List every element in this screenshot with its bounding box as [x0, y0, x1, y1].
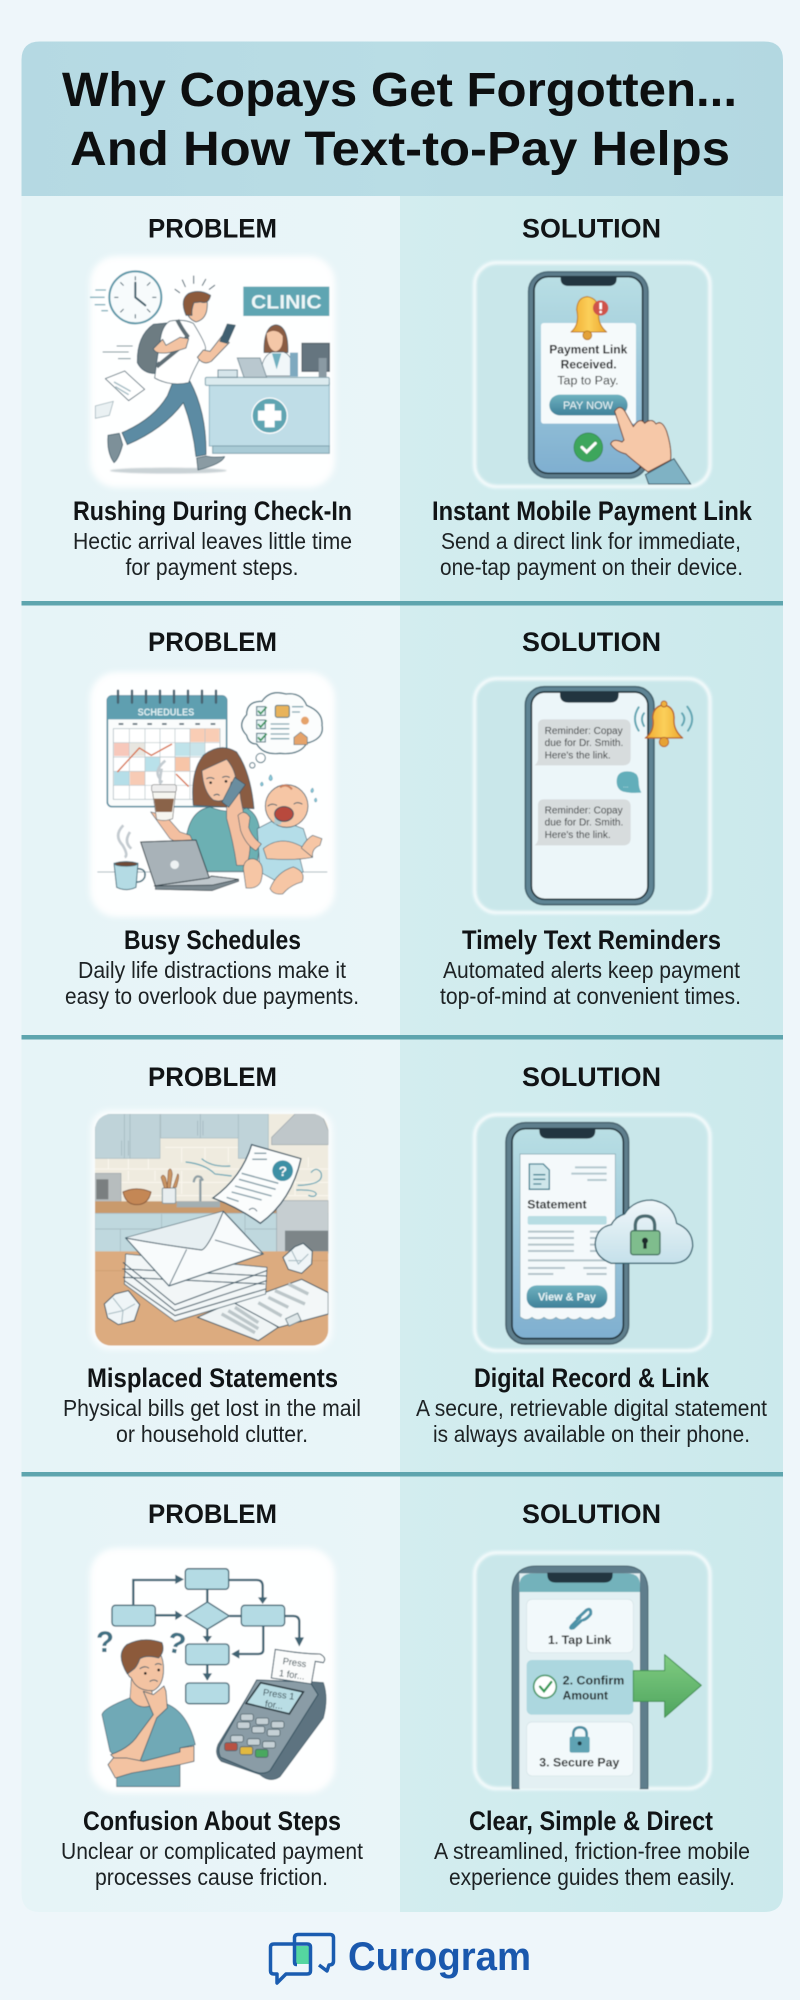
wooden table: [95, 1251, 328, 1346]
step 2 card: [527, 1660, 633, 1715]
phone: [506, 1123, 629, 1344]
body: digital record: is always available on their phone.: [433, 1421, 750, 1447]
man: [108, 291, 235, 470]
illustration: kitchen with lost mail: [91, 1110, 332, 1350]
kitchen wall and cabinets: [94, 1114, 329, 1254]
flowchart: [112, 1569, 304, 1704]
body: confusion: [61, 1838, 363, 1890]
card text: Payment Link: [549, 343, 628, 357]
body: misplaced statements: Physical bills get lost in the mail: [63, 1395, 361, 1421]
row 3: misplaced statements: [63, 1062, 767, 1447]
heading: timely text reminders: Timely Text Reminders: [462, 925, 721, 955]
thought bubble: [242, 693, 322, 768]
body: rushing: [73, 528, 352, 580]
loose papers: [198, 1279, 328, 1341]
desk: [205, 377, 329, 453]
heading: clear simple and direct: Clear, Simple & Direct: [469, 1806, 713, 1836]
body: misplaced statements: or household clutter.: [116, 1421, 308, 1447]
solution heading row 3: SOLUTION: [522, 1062, 661, 1092]
thinking man: [102, 1640, 195, 1787]
green check: [574, 433, 603, 462]
receptionist: [218, 325, 329, 377]
reminder bubble 2: Reminder: Copay: [545, 805, 623, 816]
notification card: [541, 323, 636, 424]
problem heading row 3: PROBLEM: [148, 1062, 277, 1092]
payment terminal: for...: [264, 1699, 284, 1711]
bell with alert: [571, 297, 608, 340]
body: clear simple: A streamlined, friction-free mobile: [434, 1838, 750, 1864]
laptop: [141, 840, 239, 891]
flying statement: [213, 1145, 301, 1223]
step 1 card: 1. Tap Link: [548, 1633, 612, 1647]
digital receipt: Statement: [527, 1198, 587, 1212]
reminder bubble 1: [535, 719, 631, 765]
body: misplaced statements: [63, 1395, 361, 1447]
body: confusion: Unclear or complicated payment: [61, 1838, 363, 1864]
illustration: confused man, flowchart and card terminal: [90, 1548, 335, 1793]
pay now button: PAY NOW: [563, 400, 614, 412]
row 2: busy schedules: [65, 627, 741, 1009]
phone: [529, 272, 648, 478]
body: rushing: Hectic arrival leaves little time: [73, 528, 352, 554]
clock: [90, 271, 161, 323]
illustration: phone payment link: Received.: [561, 358, 617, 372]
payment terminal: [217, 1649, 326, 1780]
cloud lock: [595, 1200, 693, 1263]
heading: busy schedules: Busy Schedules: [124, 925, 301, 955]
illustration: digital statement with cloud lock: [475, 1115, 710, 1351]
body: timely text reminders: Automated alerts keep payment: [443, 957, 740, 983]
typing bubble: ...: [623, 782, 629, 789]
title header: [22, 42, 783, 196]
heading: misplaced statements: Misplaced Statements: [87, 1363, 338, 1393]
body: confusion: processes cause friction.: [95, 1864, 328, 1890]
reminder bubble 1: Here's the link.: [545, 750, 611, 761]
illustration: three step phone flow: [475, 1553, 710, 1789]
title header: And How Text-to-Pay Helps: [70, 123, 730, 176]
illustration: phone payment link: Tap to Pay.: [557, 373, 619, 387]
heading: rushing during check-in: Rushing During Check-In: [73, 496, 352, 526]
title header: Why Copays Get Forgotten...: [62, 64, 737, 117]
payment terminal: Press: [282, 1656, 307, 1669]
question marks: ?: [96, 1626, 114, 1659]
body: clear simple: [434, 1838, 750, 1890]
row dividers: [22, 601, 783, 1476]
baby: [238, 785, 322, 894]
calendar: SCHEDULES: [138, 707, 195, 718]
phone: [525, 687, 654, 905]
body: timely text reminders: [440, 957, 741, 1009]
row 1: rushing during check-in: [73, 214, 752, 580]
hand: [611, 407, 691, 484]
solution heading row 1: SOLUTION: [522, 214, 661, 244]
digital receipt: View & Pay: [538, 1292, 597, 1304]
footer logo: Curogram: [270, 1934, 531, 1983]
clinic sign: [243, 287, 329, 316]
logo icon: chat bubbles: [270, 1934, 334, 1983]
coffee mug: [114, 862, 145, 890]
typing bubble: [617, 771, 641, 793]
body: instant link: one-tap payment on their device.: [440, 554, 743, 580]
step 2 card: 2. Confirm: [563, 1674, 624, 1688]
heading: instant mobile payment link: Instant Mobile Payment Link: [432, 496, 752, 526]
reminder bubble 2: [535, 799, 631, 845]
row 4: confusion about steps: [61, 1499, 750, 1890]
body: rushing: for payment steps.: [126, 554, 298, 580]
flying statement: ?: [279, 1163, 287, 1179]
body: instant link: [440, 528, 743, 580]
table line: [97, 871, 327, 873]
heading: confusion about steps: Confusion About Steps: [83, 1806, 341, 1836]
body: busy schedules: easy to overlook due payments.: [65, 983, 359, 1009]
payment terminal: Press 1: [262, 1687, 295, 1702]
pay now button: [549, 395, 628, 415]
solution heading row 4: SOLUTION: [522, 1499, 661, 1529]
reminder bubble 2: due for Dr. Smith.: [545, 817, 623, 828]
body: digital record: A secure, retrievable digital statement: [416, 1395, 767, 1421]
body: digital record: [416, 1395, 767, 1447]
ringing bell: [635, 701, 692, 747]
body: busy schedules: [65, 957, 359, 1009]
illustration: phone payment link: [475, 263, 710, 487]
shadow: [110, 468, 227, 474]
wind lines: [186, 1159, 321, 1196]
calendar: [107, 691, 227, 807]
step 1 card: [527, 1599, 633, 1653]
envelope stack: [122, 1211, 267, 1321]
logo wordmark: Curogram: [348, 1935, 531, 1979]
reminder bubble 1: due for Dr. Smith.: [545, 738, 623, 749]
body: clear simple: experience guides them easily.: [449, 1864, 735, 1890]
digital receipt: [520, 1154, 615, 1320]
reminder bubble 2: Here's the link.: [545, 830, 611, 841]
phone: [512, 1566, 648, 1789]
problem heading row 1: PROBLEM: [148, 214, 277, 244]
clinic sign: CLINIC: [251, 293, 322, 314]
problem heading row 4: PROBLEM: [148, 1499, 277, 1529]
illustration: man rushing past clinic desk: [90, 256, 335, 488]
solution heading row 2: SOLUTION: [522, 627, 661, 657]
step 3 card: 3. Secure Pay: [539, 1756, 620, 1770]
question marks: [96, 1626, 189, 1662]
heading: digital record and link: Digital Record & Link: [474, 1363, 709, 1393]
problem heading row 2: PROBLEM: [148, 627, 277, 657]
step 3 card: [527, 1722, 633, 1776]
green arrow: [633, 1655, 701, 1717]
body: timely text reminders: top-of-mind at convenient times.: [440, 983, 741, 1009]
woman: [151, 748, 260, 871]
steam: [118, 761, 165, 857]
body: busy schedules: Daily life distractions make it: [78, 957, 346, 983]
question marks: ?: [164, 1626, 189, 1662]
illustration: busy parent with calendar: [90, 672, 335, 917]
step 2 card: Amount: [563, 1688, 608, 1702]
body: instant link: Send a direct link for immediate,: [441, 528, 741, 554]
illustration: phone text reminders: [475, 679, 710, 913]
flying papers: [105, 371, 145, 401]
sweat drops: [260, 775, 317, 802]
crumpled paper balls: [104, 1243, 312, 1325]
payment terminal: 1 for...: [278, 1668, 305, 1682]
reminder bubble 1: Reminder: Copay: [545, 726, 623, 737]
